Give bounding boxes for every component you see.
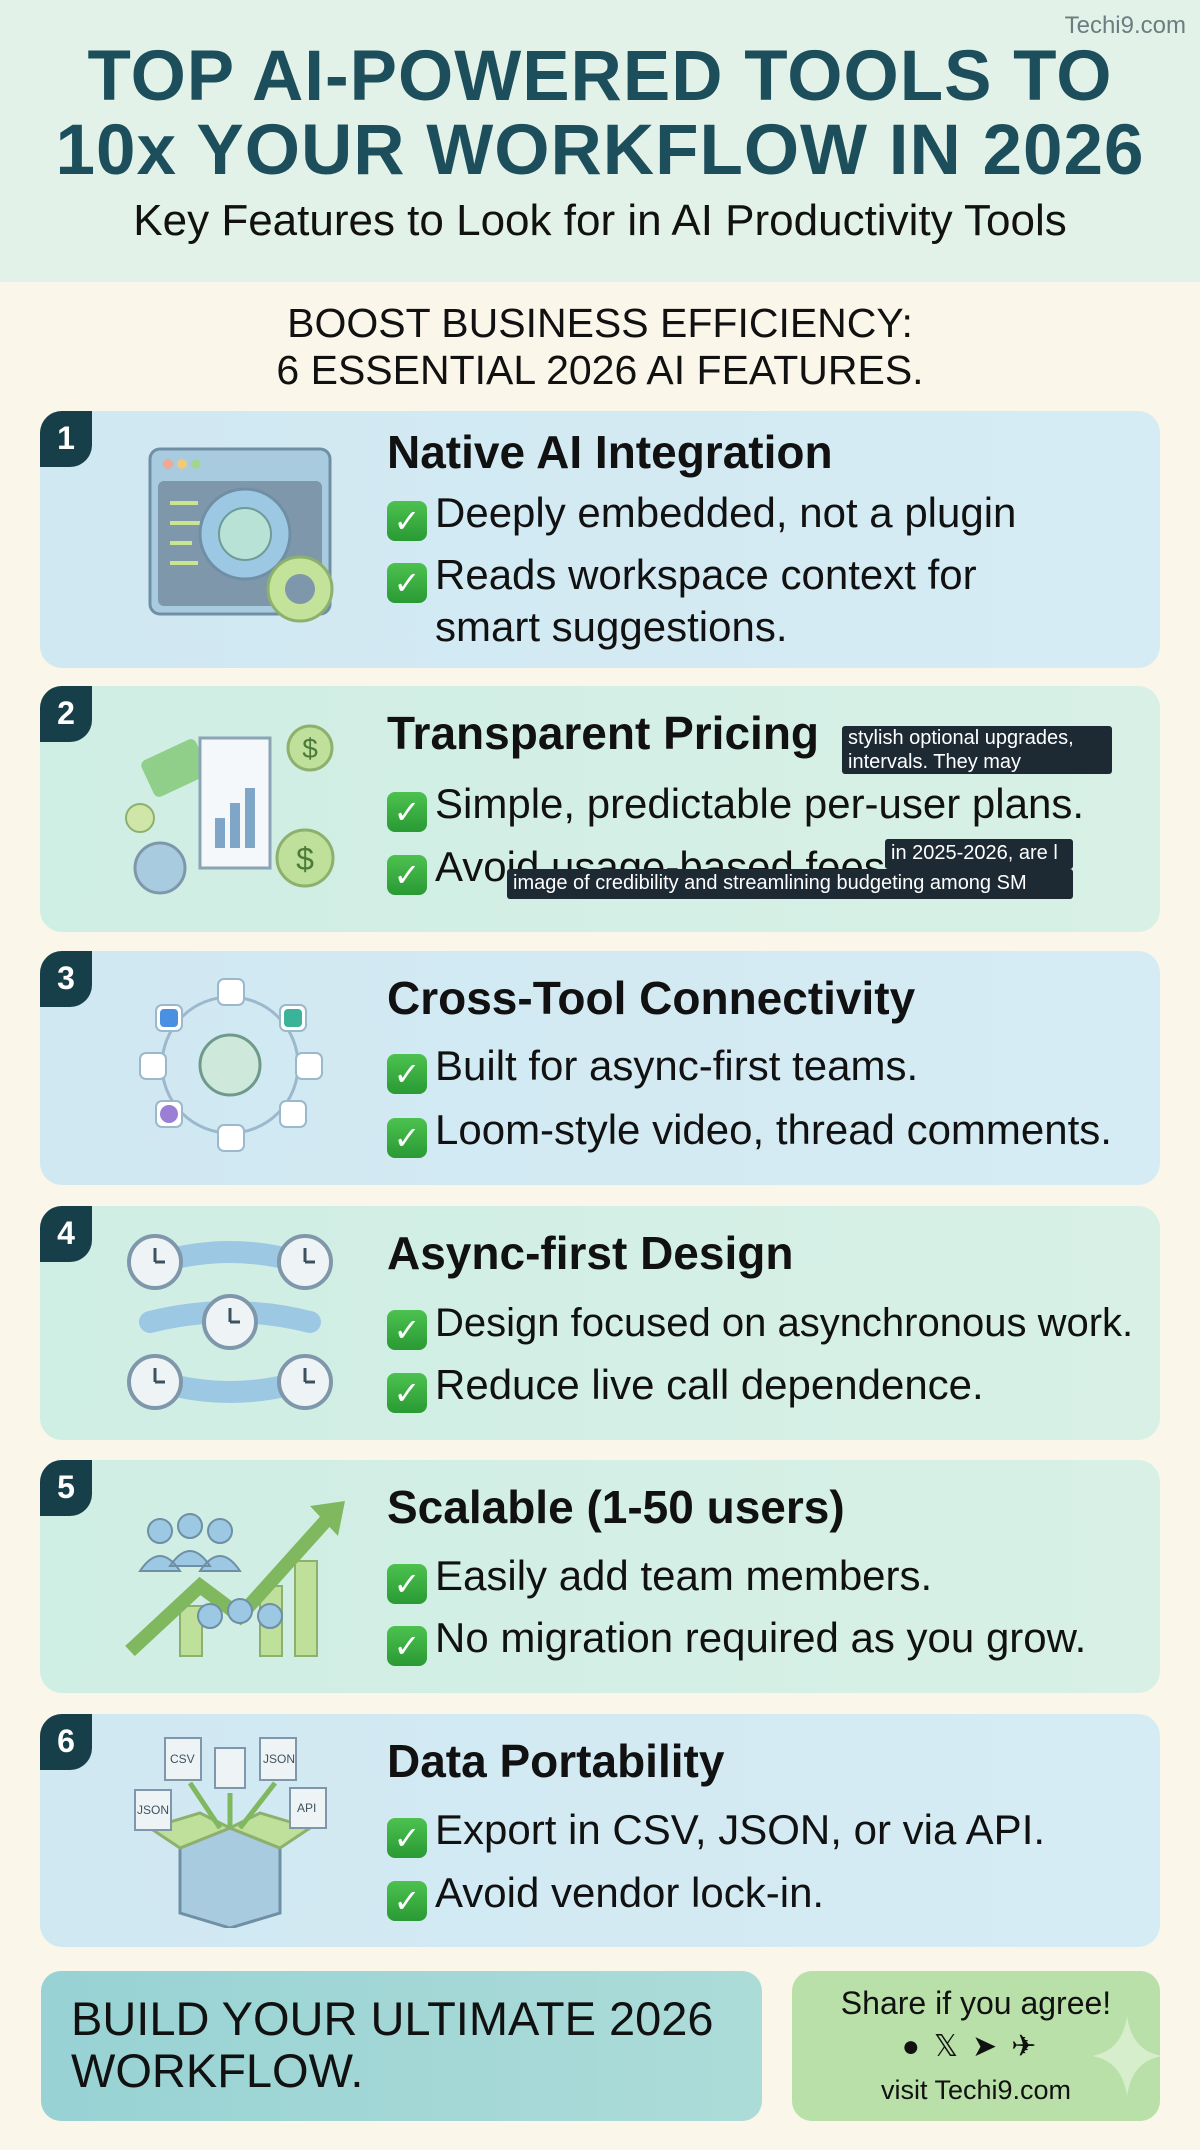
bullet 1: ✓ bbox=[394, 1566, 420, 1602]
title: TOP AI-POWERED TOOLS TO bbox=[87, 37, 1112, 116]
title bbox=[56, 37, 1144, 190]
badge 5: 5 bbox=[57, 1469, 75, 1505]
bullet 2: Loom-style video, thread comments. bbox=[435, 1106, 1112, 1153]
icon: price tag and coins: $ bbox=[302, 733, 318, 764]
badge 4: 4 bbox=[57, 1215, 75, 1251]
heading: Async-first Design bbox=[387, 1227, 793, 1279]
panel: card 6 data portability bbox=[40, 1714, 1160, 1947]
panel: card 4 async-first design bbox=[40, 1206, 1160, 1440]
header band bbox=[0, 0, 1200, 282]
callout: build workflow: WORKFLOW. bbox=[71, 2044, 363, 2097]
bullet 2: ✓ bbox=[394, 857, 420, 893]
panel: card 3 cross-tool connectivity bbox=[40, 951, 1160, 1185]
bullet 2 bbox=[387, 551, 977, 650]
bullet 1: Design focused on asynchronous work. bbox=[435, 1301, 1133, 1345]
bullet 1: ✓ bbox=[394, 503, 420, 539]
section heading: BOOST BUSINESS EFFICIENCY: bbox=[287, 300, 913, 346]
badge 6 bbox=[40, 1714, 92, 1770]
bullet 2: Avoid usage-based fees bbox=[435, 843, 885, 890]
share text: Share if you agree! bbox=[841, 1985, 1111, 2021]
icon: open box with files bbox=[134, 1737, 327, 1928]
title: 10x YOUR WORKFLOW IN 2026 bbox=[56, 111, 1144, 190]
heading: Native AI Integration bbox=[387, 426, 833, 478]
social icons: ●𝕏➤✈ bbox=[902, 2030, 1050, 2063]
icon: clocks with arrows bbox=[127, 1234, 333, 1410]
bullet 2: No migration required as you grow. bbox=[435, 1614, 1086, 1661]
badge 3 bbox=[40, 951, 92, 1007]
icon: open box with files: CSV bbox=[170, 1752, 195, 1766]
icon: browser with brain gear bbox=[148, 448, 334, 622]
heading: Transparent Pricing bbox=[387, 707, 819, 759]
bullet 2: ✓ bbox=[394, 1883, 420, 1919]
overlay artifact bottom right: in 2025-2026, are l bbox=[891, 842, 1058, 864]
overlay artifact bottom right bbox=[885, 839, 1073, 869]
bullet 1: Export in CSV, JSON, or via API. bbox=[435, 1806, 1045, 1853]
bullet 1: Easily add team members. bbox=[435, 1552, 932, 1599]
bullet 1: ✓ bbox=[394, 1820, 420, 1856]
overlay artifact bottom line bbox=[507, 869, 1073, 899]
sparkle bbox=[1092, 2016, 1162, 2096]
icon: team growth chart bbox=[125, 1501, 345, 1657]
panel: card 1 native AI integration bbox=[40, 411, 1160, 668]
subtitle: Key Features to Look for in AI Productivity Tools bbox=[133, 196, 1067, 245]
bullet 1: Deeply embedded, not a plugin bbox=[435, 489, 1016, 536]
badge 5 bbox=[40, 1460, 92, 1516]
callout: build workflow: BUILD YOUR ULTIMATE 2026 bbox=[71, 1992, 714, 2045]
overlay artifact top: stylish optional upgrades, bbox=[848, 727, 1074, 749]
icon: price tag and coins bbox=[125, 724, 334, 894]
bullet 2: Reduce live call dependence. bbox=[435, 1361, 984, 1408]
bullet 2: Reads workspace context for bbox=[435, 551, 977, 598]
overlay artifact top: intervals. They may bbox=[848, 751, 1021, 773]
bullet 2: smart suggestions. bbox=[435, 603, 788, 650]
bullet 1: Built for async-first teams. bbox=[435, 1042, 918, 1089]
badge 3: 3 bbox=[57, 960, 75, 996]
icon: open box with files: JSON bbox=[263, 1752, 295, 1766]
panel: card 5 scalable bbox=[40, 1460, 1160, 1693]
bullet 1: Simple, predictable per-user plans. bbox=[435, 780, 1084, 827]
bullet 2: ✓ bbox=[394, 1375, 420, 1411]
callout: share box bbox=[792, 1971, 1160, 2121]
bullet 1: ✓ bbox=[394, 794, 420, 830]
overlay artifact top bbox=[842, 726, 1112, 774]
bullet 2: Avoid vendor lock-in. bbox=[435, 1869, 824, 1916]
icon: open box with files: JSON bbox=[137, 1803, 169, 1817]
section heading bbox=[276, 300, 924, 393]
heading: Cross-Tool Connectivity bbox=[387, 972, 915, 1024]
badge 6: 6 bbox=[57, 1723, 75, 1759]
badge 2 bbox=[40, 686, 92, 742]
bullet 1: ✓ bbox=[394, 1056, 420, 1092]
badge 2: 2 bbox=[57, 695, 75, 731]
bullet 2: ✓ bbox=[394, 1120, 420, 1156]
badge 4 bbox=[40, 1206, 92, 1262]
bullet 2: ✓ bbox=[394, 1628, 420, 1664]
overlay artifact bottom line: image of credibility and streamlining budgeting among SM bbox=[513, 872, 1027, 894]
heading: Scalable (1-50 users) bbox=[387, 1481, 845, 1533]
badge 1 bbox=[40, 411, 92, 467]
section heading: 6 ESSENTIAL 2026 AI FEATURES. bbox=[276, 347, 924, 393]
bullet 2: ✓ bbox=[394, 565, 420, 601]
icon: app hub bbox=[139, 978, 323, 1152]
site label: Techi9.com bbox=[1065, 12, 1186, 39]
icon: price tag and coins: $ bbox=[296, 841, 314, 877]
heading: Data Portability bbox=[387, 1735, 724, 1787]
callout: build workflow bbox=[41, 1971, 762, 2121]
badge 1: 1 bbox=[57, 420, 75, 456]
bullet 1: ✓ bbox=[394, 1312, 420, 1348]
icon: open box with files: API bbox=[297, 1801, 316, 1815]
panel: card 2 transparent pricing bbox=[40, 686, 1160, 932]
visit text: visit Techi9.com bbox=[881, 2075, 1071, 2105]
